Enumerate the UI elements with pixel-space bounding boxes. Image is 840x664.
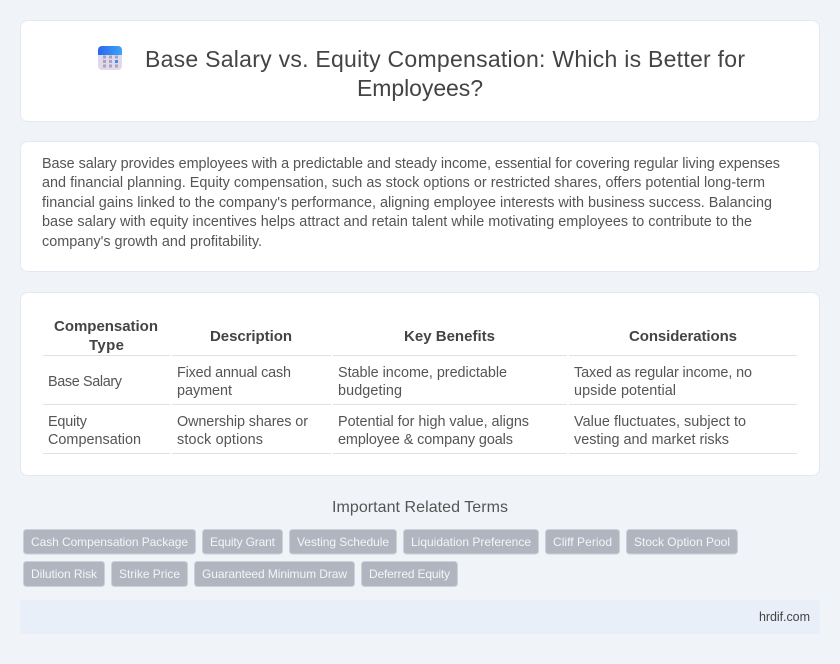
table row: base salary: Fixed annual cash	[177, 365, 291, 381]
tag: Cash Compensation Package: Cash Compensation Package	[31, 535, 188, 549]
text block: intro	[42, 156, 780, 250]
tag: Stock Option Pool: Stock Option Pool	[634, 535, 730, 549]
table row: base salary: Stable income, predictable	[338, 365, 507, 381]
table row: equity compensation: employee & company goals	[338, 432, 513, 448]
panel: title card	[20, 20, 820, 122]
tag: Strike Price: Strike Price	[119, 567, 180, 581]
table header	[54, 318, 737, 354]
table header: Compensation	[54, 318, 158, 335]
table row: base salary	[48, 365, 752, 399]
tag: Equity Grant: Equity Grant	[210, 535, 276, 549]
table header: Key Benefits	[404, 328, 495, 345]
tag: Cliff Period	[546, 530, 620, 554]
tag: Guaranteed Minimum Draw	[194, 562, 354, 586]
tag: Equity Grant	[202, 530, 282, 554]
panel: comparison table	[20, 292, 820, 476]
table row: equity compensation: Compensation	[48, 432, 141, 448]
table row: base salary: payment	[177, 383, 232, 399]
table header: Description	[210, 328, 292, 345]
tag: Deferred Equity	[362, 562, 458, 586]
title: Employees?	[357, 75, 483, 101]
footer	[20, 600, 820, 634]
title	[145, 46, 745, 101]
text block: intro: base salary with equity incentives helps attract and retain talent while motivating employees to contribute to the	[42, 214, 752, 230]
table row: base salary: Taxed as regular income, no	[574, 365, 752, 381]
table row: base salary: budgeting	[338, 383, 402, 399]
text block: intro: and financial planning. Equity compensation, such as stock options or restricted shares, offers potential long-term	[42, 175, 765, 191]
footer: hrdif.com	[759, 610, 810, 624]
tag: Strike Price	[112, 562, 188, 586]
panel: intro paragraph	[20, 142, 820, 272]
table row: equity compensation: Equity	[48, 414, 88, 430]
table row: base salary: upside potential	[574, 383, 676, 399]
text block: intro: financial gains linked to the company's performance, aligning employee interests with business success. Balancing	[42, 195, 772, 211]
table row: equity compensation: stock options	[177, 432, 263, 448]
text block: intro: Base salary provides employees with a predictable and steady income, essential for covering regular living expenses	[42, 156, 780, 172]
tags: related terms	[24, 530, 738, 586]
tag: Guaranteed Minimum Draw: Guaranteed Minimum Draw	[202, 567, 347, 581]
table row: equity compensation: vesting and market risks	[574, 432, 729, 448]
table row: equity compensation: Value fluctuates, subject to	[574, 414, 746, 430]
table row: equity compensation: Potential for high value, aligns	[338, 414, 529, 430]
heading: important related terms: Important Related Terms	[332, 499, 508, 516]
table header: Considerations	[629, 328, 737, 345]
tag: Cliff Period: Cliff Period	[553, 535, 612, 549]
tag: Deferred Equity: Deferred Equity	[369, 567, 450, 581]
table header: Type	[89, 337, 124, 354]
text block: intro: company's growth and profitability.	[42, 234, 262, 250]
tag: Stock Option Pool	[626, 530, 738, 554]
tag: Cash Compensation Package	[24, 530, 196, 554]
tag: Dilution Risk: Dilution Risk	[31, 567, 98, 581]
tag: Vesting Schedule: Vesting Schedule	[297, 535, 389, 549]
title: Base Salary vs. Equity Compensation: Which is Better for	[145, 46, 745, 72]
tag: Vesting Schedule	[290, 530, 396, 554]
table row: equity compensation: Ownership shares or	[177, 414, 308, 430]
tag: Liquidation Preference	[404, 530, 538, 554]
tag: Dilution Risk	[24, 562, 104, 586]
table row: equity compensation	[48, 414, 746, 448]
icon: calendar	[98, 46, 122, 70]
table row: base salary: Base Salary	[48, 374, 123, 390]
tag: Liquidation Preference: Liquidation Preference	[411, 535, 531, 549]
